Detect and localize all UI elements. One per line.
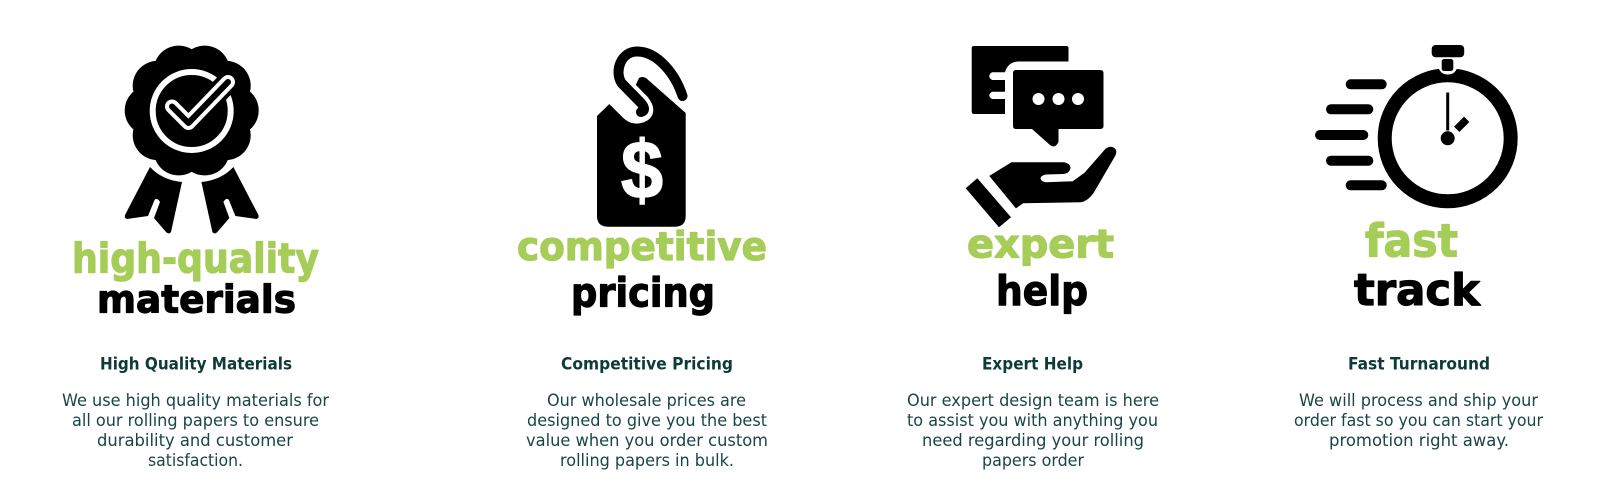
body text: papers order xyxy=(982,451,1084,471)
body text: designed to give you the best xyxy=(527,411,767,431)
body text: to assist you with anything you xyxy=(907,411,1158,431)
back speech bubble xyxy=(972,46,1068,114)
logo word: help: help xyxy=(996,267,1088,315)
body text xyxy=(526,391,768,471)
body text: value when you order custom xyxy=(526,431,768,451)
panel: high quality materials xyxy=(62,46,329,471)
front speech bubble xyxy=(1013,70,1104,146)
logo word: fast: fast xyxy=(1365,214,1458,268)
logo word: expert: expert xyxy=(967,222,1114,268)
logo word: materials: materials xyxy=(97,278,296,322)
panel: fast turnaround xyxy=(1294,45,1543,451)
panel: expert help xyxy=(907,46,1159,471)
body text xyxy=(62,391,329,471)
body text: need regarding your rolling xyxy=(922,431,1144,451)
body text xyxy=(907,391,1159,471)
icon glyph: dollar: $ xyxy=(621,125,663,216)
hand xyxy=(990,147,1116,208)
logo word: pricing: pricing xyxy=(571,270,715,316)
body text: promotion right away. xyxy=(1329,431,1509,451)
body text: We will process and ship your xyxy=(1299,391,1538,411)
panel: competitive pricing xyxy=(517,51,768,471)
body text: Our expert design team is here xyxy=(907,391,1159,411)
heading: Expert Help xyxy=(982,354,1083,374)
body text: rolling papers in bulk. xyxy=(560,451,734,471)
body text: We use high quality materials for xyxy=(62,391,329,411)
body text: all our rolling papers to ensure xyxy=(72,411,319,431)
heading: High Quality Materials xyxy=(100,354,292,374)
speed lines xyxy=(1315,79,1387,190)
icon: stopwatch with speed lines xyxy=(1315,45,1511,201)
body text xyxy=(1294,391,1543,451)
body text: durability and customer xyxy=(97,431,293,451)
body text: order fast so you can start your xyxy=(1294,411,1543,431)
logo word: competitive: competitive xyxy=(517,225,767,270)
logo word: high-quality: high-quality xyxy=(72,234,319,282)
icon: price tag with dollar sign xyxy=(597,51,686,227)
icon: award rosette with check mark xyxy=(125,46,259,233)
body text: Our wholesale prices are xyxy=(547,391,746,411)
heading: Competitive Pricing xyxy=(561,354,733,374)
icon: speech bubbles over open hand xyxy=(966,46,1116,227)
cuff xyxy=(966,178,1011,227)
body text: satisfaction. xyxy=(148,451,243,471)
heading: Fast Turnaround xyxy=(1348,354,1490,374)
logo word: track: track xyxy=(1354,265,1482,316)
